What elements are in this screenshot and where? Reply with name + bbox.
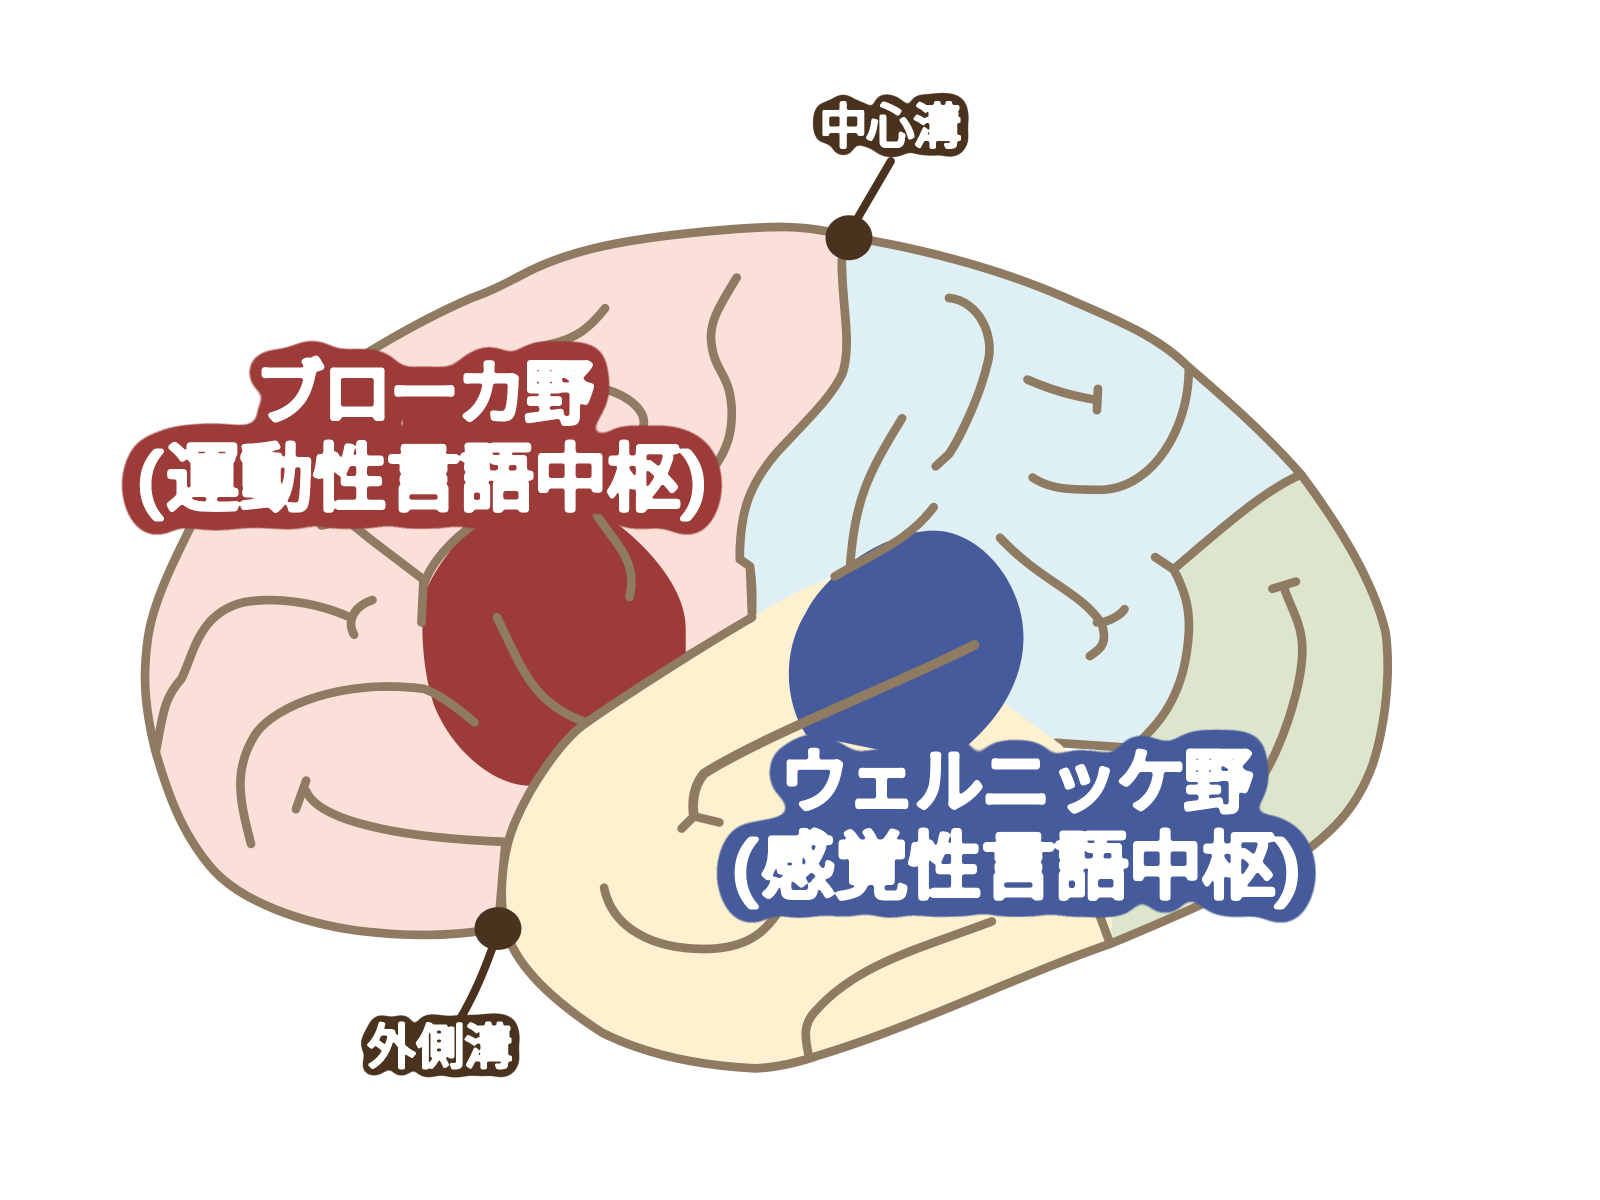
label: Broca's area: (運動性言語中枢) xyxy=(138,437,706,520)
label: Broca's area xyxy=(138,354,706,520)
Wernicke's area shape xyxy=(789,531,1023,763)
brain: parietal lobe xyxy=(740,237,1301,748)
brain: occipital lobe xyxy=(1020,474,1388,944)
label: central sulcus: 中心溝 xyxy=(819,101,961,154)
label: lateral sulcus: 外側溝 xyxy=(367,1021,512,1074)
label: Wernicke's area: ウェルニッケ野 xyxy=(780,743,1253,821)
label backing: Broca gap filler xyxy=(403,406,464,437)
label: Broca's area: ブローカ野 xyxy=(255,354,594,432)
label: Wernicke's area xyxy=(733,743,1300,908)
label: central sulcus pointer xyxy=(826,161,891,260)
brain: frontal lobe xyxy=(145,227,849,935)
label: lateral sulcus pointer xyxy=(459,907,521,1020)
label: Wernicke's area: (感覚性言語中枢) xyxy=(733,825,1300,908)
Broca's area shape xyxy=(422,510,686,786)
brain: temporal lobe xyxy=(502,551,1122,1068)
sulci grooves xyxy=(156,278,1302,1053)
